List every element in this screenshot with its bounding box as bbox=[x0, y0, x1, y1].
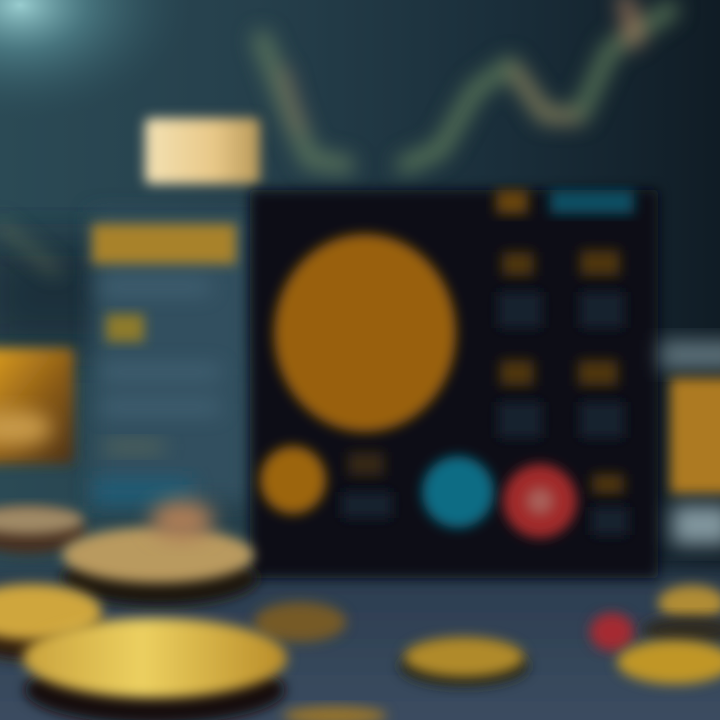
red ball bbox=[590, 613, 634, 651]
left card small label bbox=[106, 314, 144, 342]
coin: far left top bbox=[0, 510, 86, 554]
teal circle bbox=[422, 456, 494, 528]
coin: front large bbox=[25, 656, 285, 720]
coin stack: bottom right bbox=[617, 585, 720, 684]
panel: main dark board bbox=[250, 190, 658, 578]
table surface bbox=[0, 570, 720, 720]
header label orange bbox=[496, 190, 528, 214]
gold bar left bbox=[0, 348, 74, 464]
cream card bbox=[145, 118, 260, 184]
left card bottom teal strip bbox=[92, 478, 192, 506]
coin: bottom bbox=[283, 706, 387, 720]
coin: middle bbox=[62, 550, 258, 606]
coin stack: bottom left bbox=[0, 500, 387, 720]
left card text lines bbox=[100, 280, 220, 414]
coin: center table bbox=[400, 637, 528, 686]
left card heading bar bbox=[92, 224, 236, 264]
line chart: background trend bbox=[0, 0, 670, 270]
stat text lines bbox=[342, 292, 628, 535]
gold bar right bbox=[660, 340, 720, 545]
big orange circle bbox=[274, 234, 456, 432]
coin: left middle bbox=[0, 604, 104, 660]
left card lower label bbox=[104, 440, 164, 454]
stat labels bbox=[348, 250, 624, 494]
coin: rear right bbox=[254, 602, 346, 642]
panel: left blue card bbox=[92, 212, 252, 506]
header label teal bbox=[550, 190, 634, 214]
small orange circle bbox=[260, 446, 326, 514]
red circle bbox=[503, 464, 577, 538]
